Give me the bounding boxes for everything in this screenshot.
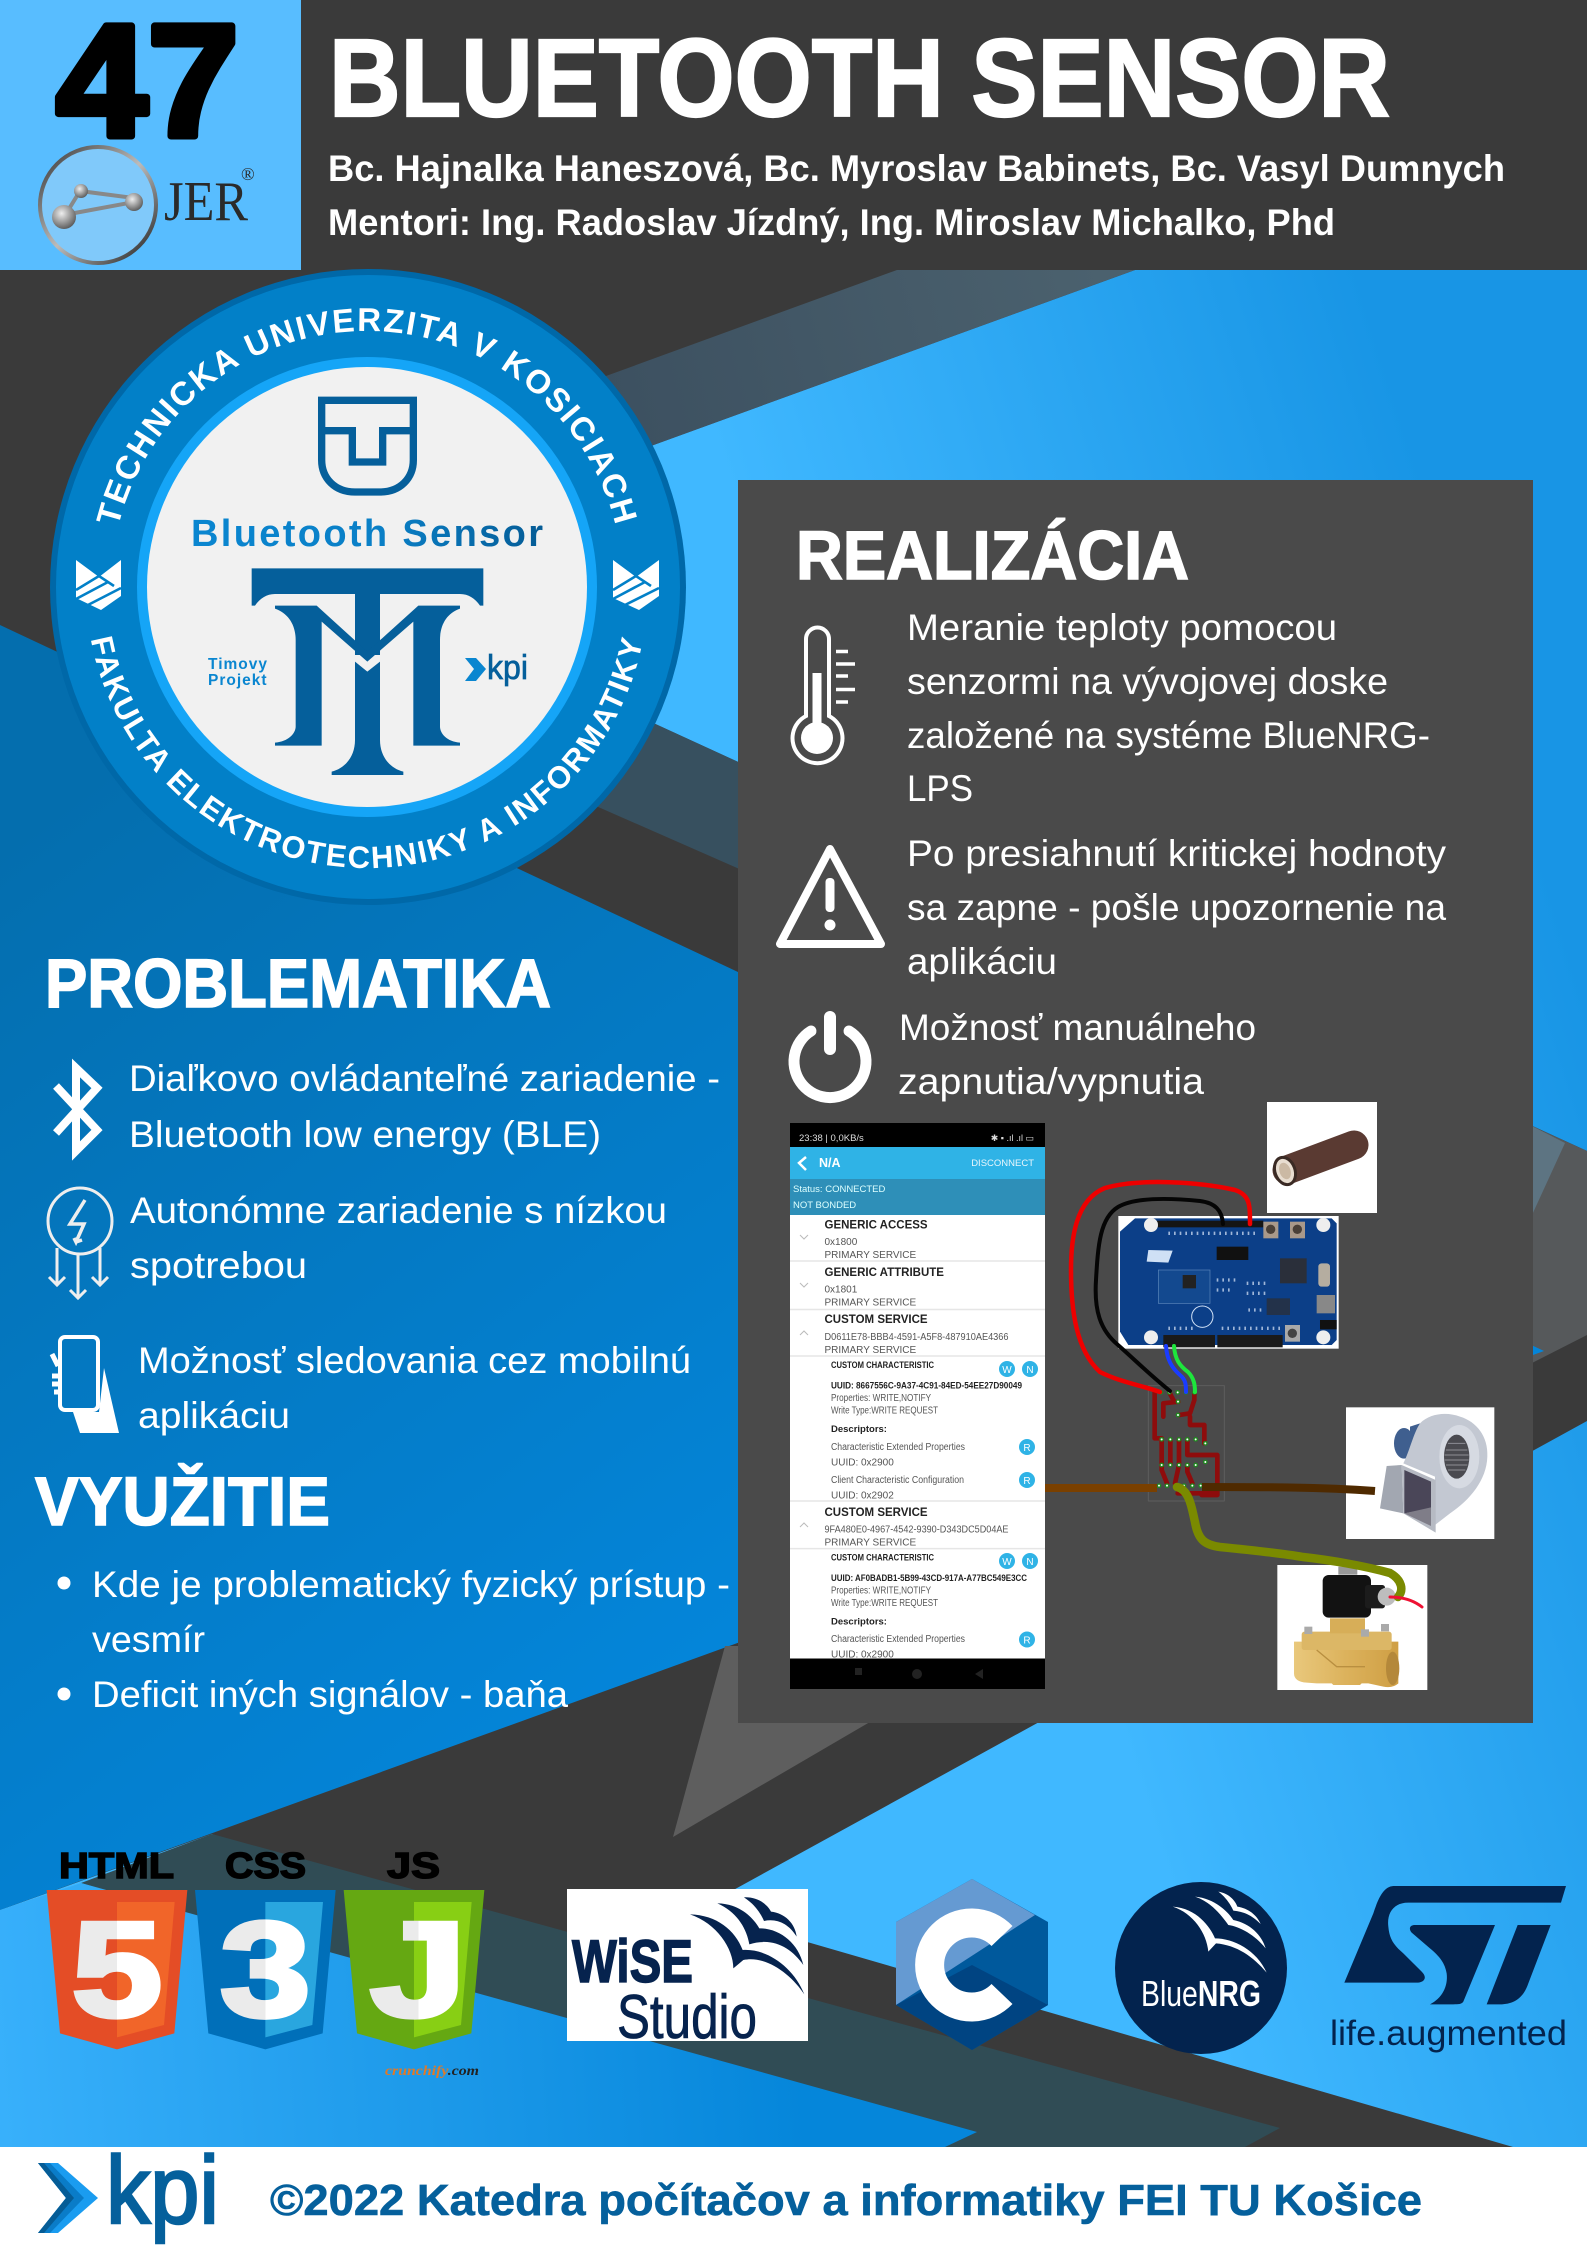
image: battery	[1267, 1102, 1377, 1213]
section: problematika	[45, 945, 720, 1436]
logo: C language	[896, 1879, 1048, 2050]
icon: power	[794, 1017, 866, 1098]
phone screenshot	[790, 1123, 1045, 1689]
authors: Bc. Hajnalka Haneszová, Bc. Myroslav Babinets, Bc. Vasyl Dumnych	[328, 148, 1505, 189]
project title: BLUETOOTH SENSOR	[329, 17, 1390, 140]
green wire	[1174, 1346, 1195, 1392]
text: temperature: LPS	[907, 768, 973, 809]
image: solenoid valve	[1277, 1565, 1427, 1690]
PCB layout	[1148, 1386, 1224, 1501]
mentors: Mentori: Ing. Radoslav Jízdný, Ing. Miroslav Michalko, Phd	[328, 202, 1335, 243]
bullet list: Deficit iných signálov - baňa	[92, 1674, 568, 1715]
tagline: life.augmented	[1330, 2014, 1567, 2053]
phone screenshot: Properties: WRITE,NOTIFY	[831, 1586, 931, 1597]
text: critical value: Po presiahnutí kritickej hodnoty	[907, 833, 1447, 874]
phone screenshot: DISCONNECT	[971, 1158, 1034, 1169]
registered mark: ®	[241, 164, 255, 184]
phone screenshot: Status: CONNECTED	[793, 1184, 886, 1195]
team label: Projekt	[208, 672, 268, 689]
JER wordmark: JER	[164, 171, 249, 233]
heading: REALIZÁCIA	[796, 517, 1189, 594]
phone screenshot: Descriptors:	[831, 1424, 887, 1435]
phone screenshot: Client Characteristic Configuration	[831, 1475, 964, 1486]
heading: PROBLEMATIKA	[45, 945, 551, 1022]
red wire	[1071, 1182, 1250, 1392]
seal text bottom: FAKULTA ELEKTROTECHNIKY A INFORMATIKY	[91, 636, 642, 868]
kpi wordmark: kpi	[106, 2137, 219, 2244]
badge: university seal	[50, 269, 686, 905]
heading: VYUŽITIE	[35, 1463, 330, 1540]
image: development board	[1118, 1216, 1339, 1349]
wiring: PCB and cables	[1045, 1182, 1422, 1607]
icon: small kpi chevron	[465, 658, 486, 681]
icon: warning	[780, 849, 881, 944]
wordmark: Studio	[617, 1983, 757, 2052]
text: temperature: založené na systéme BlueNRG-	[907, 715, 1430, 756]
wings	[1173, 1892, 1267, 1973]
phone screenshot: PRIMARY SERVICE	[824, 1250, 917, 1261]
phone screenshot: R	[1023, 1636, 1031, 1646]
phone screenshot: PRIMARY SERVICE	[824, 1298, 917, 1308]
phone screenshot: UUID: 0x2900	[831, 1458, 894, 1469]
phone screenshot: PRIMARY SERVICE	[824, 1537, 917, 1548]
item text: mobile app: aplikáciu	[138, 1395, 290, 1436]
icon: thermometer	[792, 628, 855, 763]
text: temperature: senzormi na vývojovej doske	[907, 661, 1388, 702]
item text: mobile app: Možnosť sledovania cez mobilnú	[138, 1340, 691, 1381]
image: blower fan	[1346, 1407, 1494, 1539]
icon: TM monogram	[252, 568, 483, 775]
phone screenshot: D0611E78-BBB4-4591-A5F8-487910AE4366	[824, 1332, 1009, 1343]
phone screenshot: Descriptors:	[831, 1616, 887, 1628]
label CSS: CSS	[225, 1845, 306, 1886]
item text: remote control: Diaľkovo ovládanteľné zariadenie -	[129, 1058, 720, 1099]
phone screenshot: PRIMARY SERVICE	[824, 1345, 917, 1356]
text: temperature: Meranie teploty pomocou	[907, 607, 1337, 648]
logos: web technologies	[47, 1845, 484, 2079]
logo: BlueNRG	[1115, 1882, 1287, 2054]
team label: Timovy	[208, 656, 268, 673]
phone screenshot: N/A	[819, 1156, 841, 1170]
phone screenshot: W	[1002, 1365, 1012, 1376]
phone screenshot: CUSTOM SERVICE	[824, 1314, 928, 1326]
icon: JER ring logo	[40, 147, 156, 263]
icon: HTML5 shield: 5	[72, 1894, 162, 2045]
icon: bluetooth	[56, 1068, 97, 1151]
phone screenshot: UUID: 0x2902	[831, 1490, 894, 1501]
dark brown wire: fan	[1202, 1487, 1375, 1491]
poster number box	[0, 0, 301, 270]
phone screenshot: 23:38 | 0,0KB/s	[799, 1133, 864, 1144]
icon: HTML5 shield	[47, 1890, 187, 2049]
bullet list	[58, 1564, 730, 1715]
phone screenshot: CUSTOM CHARACTERISTIC	[831, 1552, 934, 1564]
text: critical value: sa zapne - pošle upozornenie na	[907, 887, 1446, 928]
blue wire	[1166, 1346, 1186, 1392]
icon: low power	[48, 1188, 112, 1298]
phone screenshot: Properties: WRITE,NOTIFY	[831, 1393, 931, 1404]
olive wire: valve	[1177, 1487, 1401, 1597]
wings	[690, 1897, 804, 1994]
phone screenshot: R	[1023, 1443, 1031, 1454]
text: manual switch: Možnosť manuálneho	[899, 1007, 1256, 1048]
phone screenshot: UUID: 0x2900	[831, 1649, 894, 1660]
icon: TU shield	[322, 400, 413, 492]
icon: kpi chevron	[38, 2163, 98, 2233]
phone screenshot: GENERIC ATTRIBUTE	[824, 1267, 944, 1279]
section: vyuzitie	[35, 1463, 730, 1715]
phone screenshot: W	[1002, 1557, 1012, 1568]
seal text top: TECHNICKA UNIVERZITA V KOSICIACH	[96, 308, 637, 524]
phone screenshot: ✱ ▪ .ıl .ıl ▭	[991, 1133, 1034, 1143]
logo: WiSE Studio	[567, 1889, 808, 2052]
phone screenshot: GENERIC ACCESS	[824, 1220, 928, 1232]
icon: JS shield: J	[370, 1894, 467, 2045]
bullet list: vesmír	[92, 1619, 205, 1660]
logo: ST	[1330, 1886, 1567, 2053]
phone screenshot: NOT BONDED	[793, 1200, 856, 1211]
icon: left M emblem	[76, 560, 121, 610]
phone screenshot: Characteristic Extended Properties	[831, 1442, 965, 1453]
footer	[0, 2137, 1587, 2245]
item text: autonomous: Autonómne zariadenie s nízkou	[130, 1190, 667, 1231]
text: manual switch: zapnutia/vypnutia	[898, 1061, 1204, 1102]
phone screenshot: R	[1023, 1476, 1031, 1487]
icon: CSS3 shield	[195, 1890, 336, 2049]
emblem	[1344, 1886, 1566, 2004]
icon: right M emblem	[613, 560, 659, 610]
bullet list: Kde je problematický fyzický prístup -	[92, 1564, 730, 1605]
label HTML: HTML	[59, 1845, 174, 1886]
header bar	[301, 0, 1587, 270]
label JS: JS	[387, 1845, 440, 1886]
badge heading: Bluetooth Sensor	[191, 513, 543, 555]
red wire: valve	[1390, 1597, 1422, 1607]
phone screenshot: 9FA480E0-4967-4542-9390-D343DC5D04AE	[824, 1524, 1009, 1535]
item text: remote control: Bluetooth low energy (BLE)	[129, 1114, 601, 1155]
small kpi wordmark: kpi	[487, 649, 528, 687]
phone screenshot: UUID: AF0BADB1-5B99-43CD-917A-A77BC549E3CC	[831, 1573, 1027, 1584]
credit: crunchify .com	[385, 2064, 479, 2079]
phone screenshot: 0x1801	[824, 1284, 858, 1296]
phone screenshot: N	[1026, 1365, 1034, 1376]
phone screenshot: CUSTOM CHARACTERISTIC	[831, 1360, 934, 1371]
black wire	[1096, 1199, 1223, 1391]
wordmark: BlueNRG	[1141, 1973, 1261, 2014]
phone screenshot: UUID: 8667556C-9A37-4C91-84ED-54EE27D90049	[831, 1380, 1022, 1392]
item text: autonomous: spotrebou	[130, 1245, 307, 1286]
copyright: ©2022 Katedra počítačov a informatiky FEI TU Košice	[270, 2176, 1422, 2225]
panel: realizacia	[738, 480, 1533, 1723]
icon: phone in hand	[52, 1337, 119, 1433]
phone screenshot: Write Type:WRITE REQUEST	[831, 1598, 938, 1609]
icon: CSS3 shield: 3	[220, 1894, 311, 2045]
icon: JS shield	[344, 1890, 484, 2049]
wordmark: WiSE	[572, 1928, 693, 1995]
phone screenshot: N	[1026, 1557, 1034, 1568]
brown wire: power	[1045, 1484, 1157, 1492]
phone screenshot: Write Type:WRITE REQUEST	[831, 1406, 938, 1416]
phone screenshot: 0x1800	[824, 1237, 858, 1248]
phone screenshot: Characteristic Extended Properties	[831, 1634, 965, 1645]
phone screenshot: CUSTOM SERVICE	[824, 1507, 928, 1519]
text: critical value: aplikáciu	[907, 941, 1057, 982]
